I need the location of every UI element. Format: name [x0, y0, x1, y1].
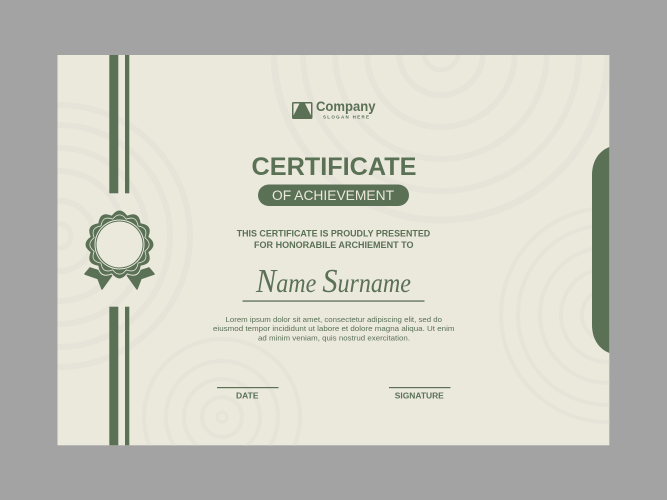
body text: Lorem ipsum dolor sit amet, consectetur adipiscing elit, sed do: [226, 315, 442, 324]
icon: rosette seal: [85, 210, 154, 289]
right side green tab: [592, 147, 609, 353]
recipient name: Name Surname: [255, 263, 411, 300]
date field: DATE: [236, 390, 259, 400]
seal badge: [85, 210, 154, 279]
title: CERTIFICATE: [252, 153, 416, 181]
certificate card: [58, 55, 609, 445]
seal ribbon tails: [85, 268, 154, 289]
body text: [213, 315, 454, 343]
presentation statement: FOR HONORABILE ARCHIEMENT TO: [254, 240, 414, 251]
company name: Company: [316, 99, 376, 114]
ribbon stripes bottom: [109, 307, 129, 445]
date field: [217, 387, 278, 400]
slogan: SLOGAN HERE: [323, 114, 369, 120]
signature field: SIGNATURE: [395, 390, 444, 400]
background concentric rings: [148, 55, 610, 446]
name underline: [242, 300, 424, 302]
presentation statement: THIS CERTIFICATE IS PROUDLY PRESENTED: [237, 228, 430, 240]
ribbon stripes top: [109, 55, 129, 193]
subtitle pill: [258, 184, 409, 206]
signature field: [389, 387, 450, 400]
presentation statement: [237, 228, 430, 251]
subtitle pill: OF ACHIEVEMENT: [272, 188, 394, 203]
body text: eiusmod tempor incididunt ut labore et dolore magna aliqua. Ut enim: [213, 324, 454, 333]
body text: ad minim veniam, quis nostrud exercitation.: [258, 334, 410, 343]
icon: company logo: [292, 102, 312, 119]
